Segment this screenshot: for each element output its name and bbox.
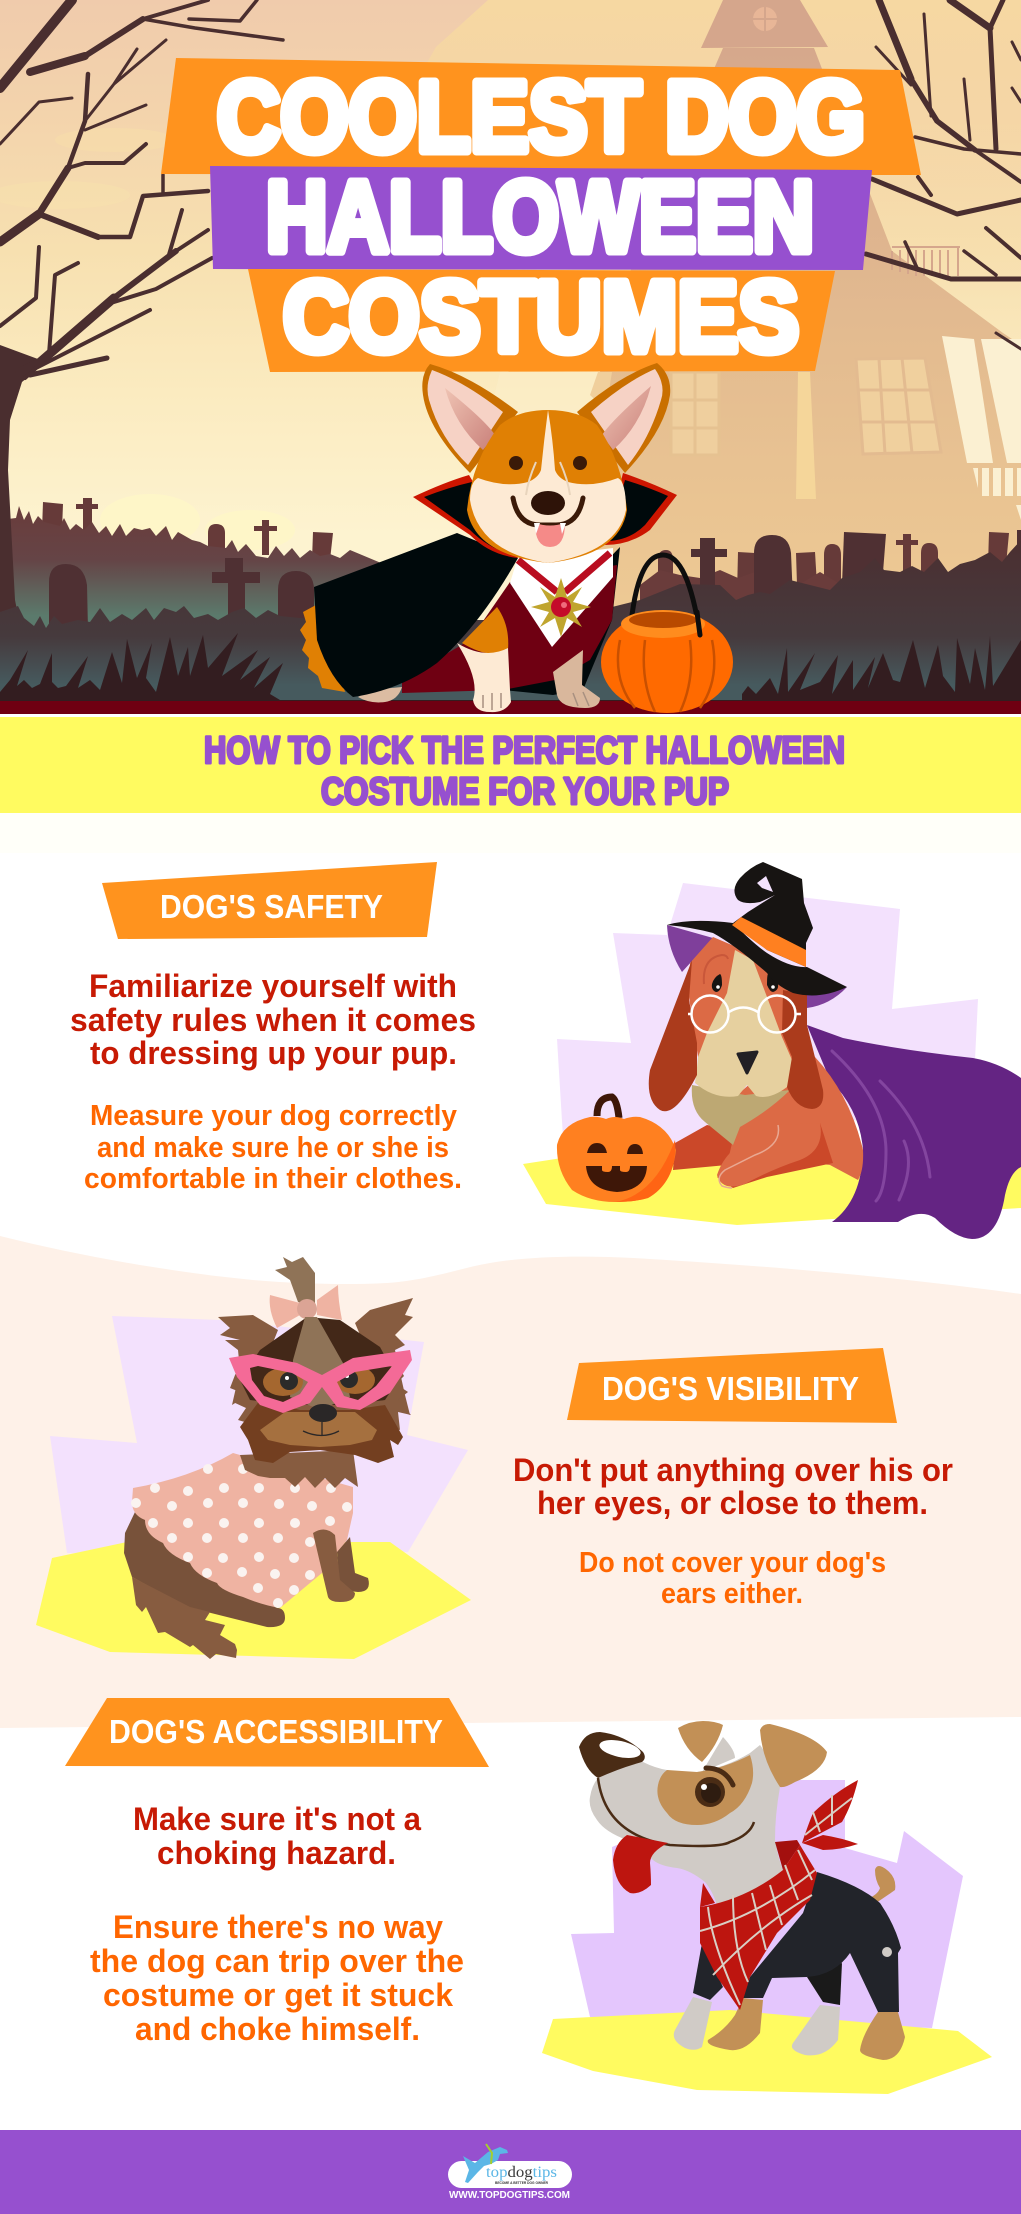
text: eyes: Don't put anything over his or bbox=[513, 1452, 953, 1488]
tail bbox=[865, 1866, 895, 1905]
medallion bbox=[531, 578, 591, 637]
corgi in vampire costume bbox=[300, 363, 677, 712]
text: measure your dog: comfortable in their clothes. bbox=[84, 1163, 462, 1195]
trousers bbox=[693, 1872, 901, 2012]
cape right bbox=[503, 547, 620, 695]
lilac backdrop bbox=[571, 1780, 963, 2028]
beard bbox=[240, 1400, 403, 1463]
heading: dog's accessibility bbox=[65, 1698, 489, 1767]
shirt bbox=[510, 548, 613, 647]
far graveyard with tombstones bbox=[0, 498, 1021, 640]
subtitle band bbox=[0, 717, 1021, 813]
jack-o-lantern bbox=[557, 1097, 676, 1202]
head bbox=[649, 937, 823, 1111]
title banner: costumes: COSTUMES bbox=[283, 261, 799, 373]
haunted house bbox=[440, 0, 1021, 620]
bandana bbox=[700, 1780, 858, 2010]
title banner: coolest dog: COOLEST DOG bbox=[217, 61, 865, 173]
collar bbox=[413, 473, 677, 558]
panel: visibility background bbox=[0, 1236, 1021, 1728]
back paw bbox=[358, 687, 402, 702]
footer bar bbox=[0, 2130, 1021, 2214]
lilac backdrop bbox=[50, 1316, 468, 1553]
yellow floor bbox=[523, 1146, 1021, 1225]
tail bbox=[300, 605, 345, 692]
text: trip: and choke himself. bbox=[135, 2011, 420, 2047]
text: ears: Do not cover your dog's bbox=[579, 1547, 886, 1579]
rear inner leg bbox=[807, 1963, 842, 2005]
text: safety rules: Familiarize yourself with bbox=[89, 968, 457, 1004]
heading: dog's visibility bbox=[567, 1348, 897, 1423]
text: measure your dog: Measure your dog correctly bbox=[90, 1100, 457, 1132]
panel: dog's accessibility text bbox=[65, 1698, 489, 2047]
legs bbox=[313, 1529, 369, 1602]
text: safety rules bbox=[70, 968, 476, 1071]
foreground grass bbox=[0, 633, 1021, 702]
yorkie head bbox=[218, 1298, 413, 1463]
button bbox=[882, 1947, 892, 1957]
head bbox=[467, 410, 627, 563]
heading: dog's safety bbox=[102, 862, 437, 939]
glasses bbox=[229, 1350, 412, 1413]
ribbon bbox=[518, 553, 610, 592]
text: eyes bbox=[513, 1452, 953, 1521]
cape bbox=[807, 1025, 1021, 1239]
tail bbox=[132, 1577, 237, 1659]
text: measure your dog bbox=[84, 1100, 462, 1195]
text: ears bbox=[579, 1547, 886, 1610]
text: trip: costume or get it stuck bbox=[103, 1977, 453, 2013]
cape bbox=[314, 533, 518, 697]
logo: top dog tips: BECOME A BETTER DOG OWNER bbox=[495, 2180, 548, 2185]
title banner: halloween: HALLOWEEN bbox=[266, 161, 814, 273]
right tree bbox=[866, 0, 1021, 349]
yellow floor bbox=[36, 1542, 471, 1659]
illustration: terrier with bandana bbox=[542, 1721, 992, 2094]
witch hat bbox=[667, 862, 847, 995]
title bbox=[161, 58, 921, 373]
illustration: witch hound bbox=[523, 862, 1021, 1239]
paws bbox=[674, 1997, 905, 2060]
subtitle band: HOW TO PICK THE PERFECT HALLOWEEN bbox=[204, 730, 845, 772]
website url: WWW.TOPDOGTIPS.COM bbox=[449, 2190, 570, 2201]
text: measure your dog: and make sure he or she is bbox=[97, 1132, 449, 1164]
left tree bbox=[0, 0, 283, 628]
text: choking: Make sure it's not a bbox=[133, 1801, 421, 1837]
yellow floor bbox=[542, 2010, 992, 2094]
text: safety rules: to dressing up your pup. bbox=[90, 1035, 457, 1071]
cheek fur bbox=[230, 1350, 411, 1430]
illustration: yorkie in polka dot dress bbox=[36, 1257, 471, 1659]
tunic bbox=[402, 565, 617, 693]
subtitle band: COSTUME FOR YOUR PUP bbox=[321, 771, 729, 813]
heading: dog's accessibility: DOG'S ACCESSIBILITY bbox=[109, 1713, 443, 1750]
text: choking: choking hazard. bbox=[157, 1835, 396, 1871]
ears bbox=[422, 363, 670, 473]
lilac backdrop bbox=[557, 883, 978, 1170]
text: trip bbox=[90, 1909, 464, 2047]
logo: top dog tips: topdogtips bbox=[486, 2164, 557, 2181]
text: trip: Ensure there's no way bbox=[113, 1909, 443, 1945]
mid ground grass bbox=[0, 540, 1021, 701]
text: ears: ears either. bbox=[661, 1578, 803, 1610]
panel: dog's visibility text bbox=[513, 1348, 953, 1610]
heading: dog's safety: DOG'S SAFETY bbox=[160, 888, 383, 925]
logo: top dog tips bbox=[448, 2144, 572, 2188]
text: eyes: her eyes, or close to them. bbox=[537, 1485, 928, 1521]
ground band bbox=[0, 701, 1021, 714]
text: trip: the dog can trip over the bbox=[90, 1943, 464, 1979]
text: choking bbox=[133, 1801, 421, 1871]
body bbox=[124, 1512, 285, 1627]
shoulder bbox=[462, 607, 508, 654]
front legs bbox=[457, 643, 600, 712]
neck fur bbox=[240, 1450, 358, 1488]
hat underside bbox=[667, 925, 847, 1008]
tuft and bow bbox=[270, 1257, 342, 1328]
heading: dog's visibility: DOG'S VISIBILITY bbox=[602, 1370, 859, 1407]
panel: dog's safety text bbox=[70, 862, 476, 1195]
text: safety rules: safety rules when it comes bbox=[70, 1002, 476, 1038]
candy bucket pumpkin bbox=[601, 555, 733, 713]
hero scene bbox=[0, 0, 1021, 714]
body and paws bbox=[673, 1040, 863, 1188]
chest bbox=[692, 1085, 790, 1145]
icon: jumping dog bbox=[463, 2144, 508, 2183]
polka dot dress bbox=[131, 1453, 353, 1608]
terrier head bbox=[579, 1721, 827, 1905]
